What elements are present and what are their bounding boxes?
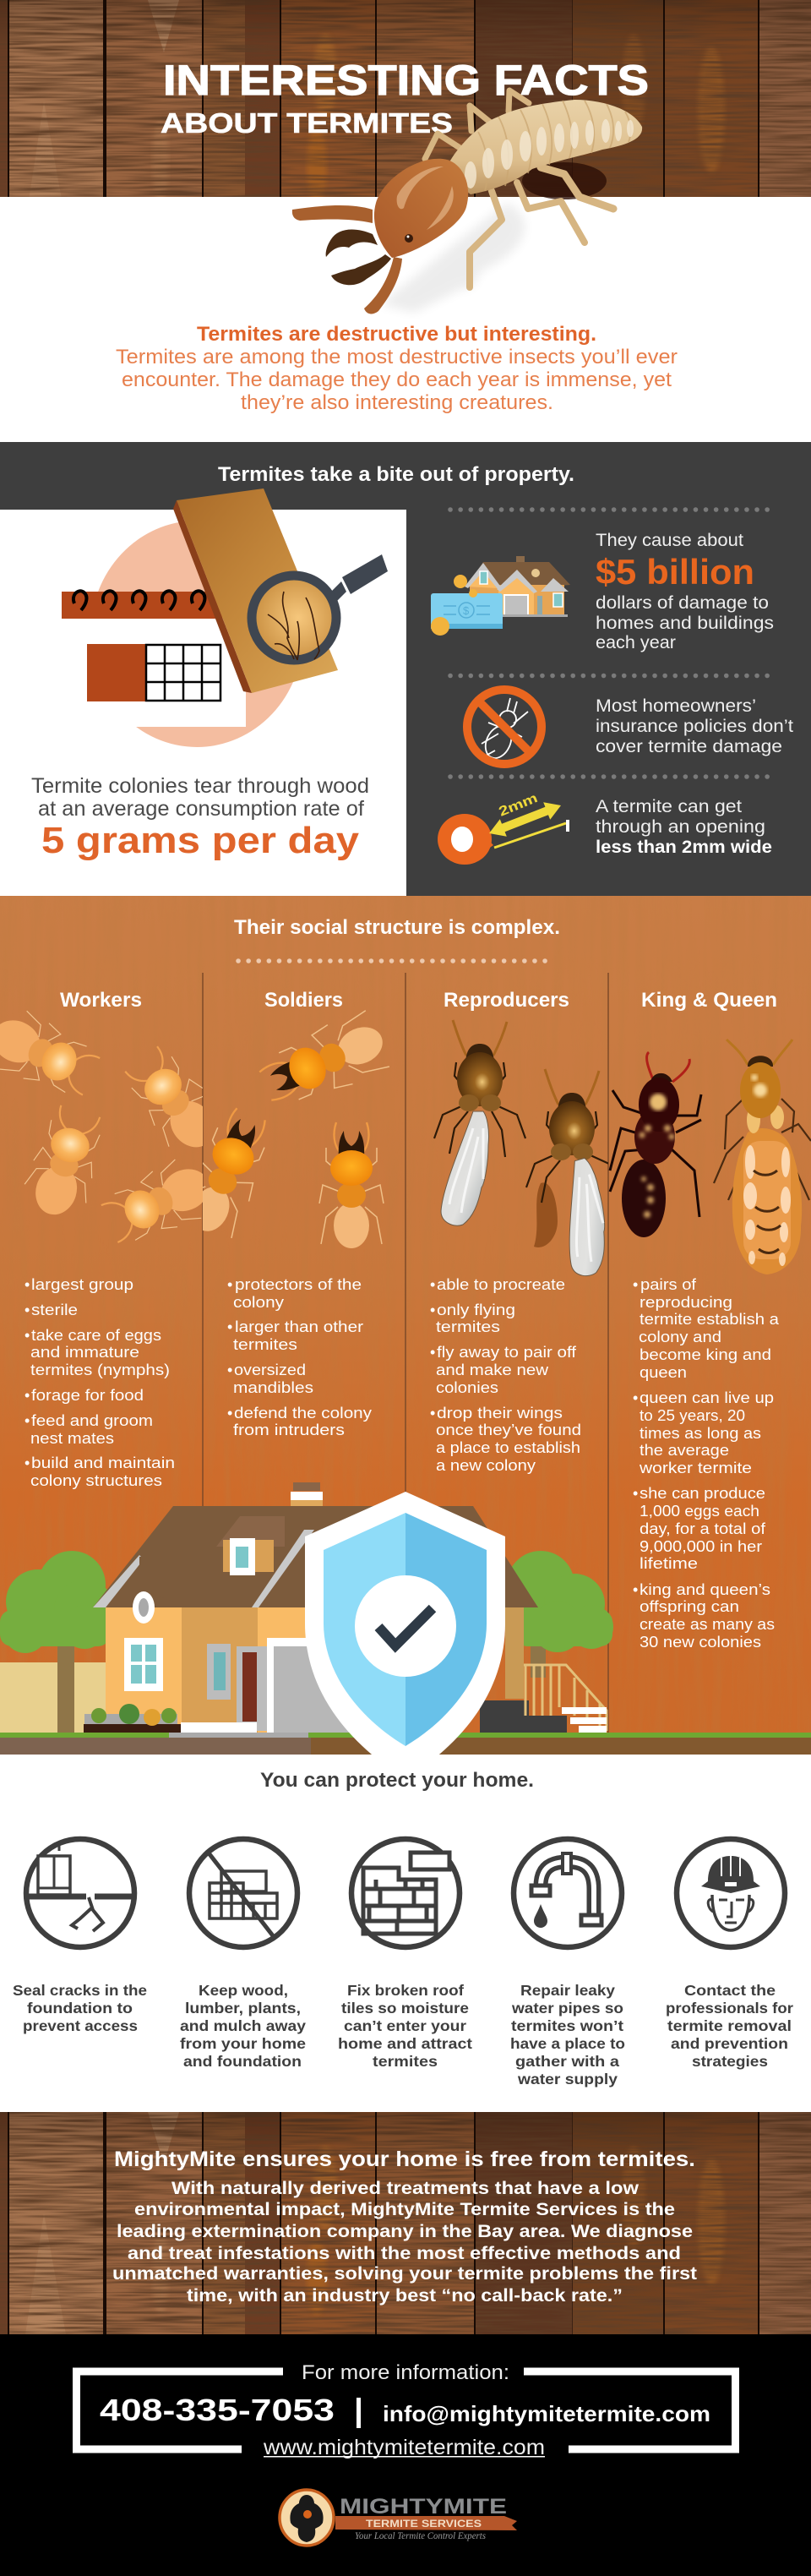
text block: intro: Termites are among the most destructive insects you’ll ever [116,346,678,368]
text: seal cracks [13,1982,147,2034]
text block: insurance: Most homeowners’ [596,696,756,716]
text block: consumption rate: 5 grams per day [41,820,360,861]
bullet list: workers: termites (nymphs) [30,1362,170,1378]
text block: intro: they’re also interesting creatures. [241,391,553,414]
bullet list: king and queen: 1,000 eggs each [640,1503,759,1520]
text: repair pipes: water pipes so [511,2000,623,2017]
text: fix roof tiles: termites [373,2053,438,2070]
text: email: info@mightymitetermite.com [383,2401,710,2426]
bullet list: king and queen: • [633,1581,638,1598]
round window [133,1591,155,1624]
text: contact professionals: and prevention [671,2035,788,2052]
logo: MightyMite: TERMITE SERVICES [366,2518,482,2530]
bullet list: king and queen: times as long as [640,1425,761,1442]
bullet list: soldiers [227,1276,372,1438]
bullet list: reproducers: a place to establish [436,1439,580,1456]
panel: white wood consumption card [0,510,406,896]
chimney [291,1482,323,1506]
queen [714,1040,811,1274]
bullet list: king and queen: create as many as [640,1616,775,1633]
bullet list: king and queen: • [633,1389,638,1406]
bullet list: king and queen: lifetime [640,1555,698,1572]
bullet list: king and queen: she can produce [640,1485,765,1502]
fence [0,1662,110,1733]
illustration: king and queen termites [610,1040,811,1274]
icon: house and money [431,556,570,636]
icon: no termite sign [467,690,542,764]
panel: property section [0,442,811,896]
bullet list: reproducers: • [430,1344,435,1361]
bullet list: workers: feed and groom [31,1412,153,1429]
heading: property: Termites take a bite out of property. [218,463,574,486]
text: repair pipes: Repair leaky [520,1982,615,1999]
bullet list: king and queen: king and queen’s [640,1581,770,1598]
text: repair pipes: have a place to [510,2035,625,2052]
bullet list: king and queen: the average [640,1442,729,1459]
ground [0,1733,811,1755]
column headings: King & Queen [641,989,777,1012]
text: seal cracks: prevent access [23,2017,138,2034]
illustration: wood, calendar and magnifier [62,488,388,747]
text block: 5 billion: They cause about [596,530,743,550]
side window [207,1644,231,1700]
bullet list: reproducers: colonies [436,1379,498,1396]
column headings [60,989,777,1012]
logo: MightyMite: Your Local Termite Control Experts [355,2530,486,2541]
text: fix roof tiles [338,1982,472,2070]
text: contact professionals [666,1982,793,2070]
text: keep wood: Keep wood, [199,1982,288,1999]
bullet list: workers: • [24,1412,30,1429]
bullet list: soldiers: defend the colony [234,1405,372,1422]
bullet list: soldiers: mandibles [233,1379,313,1396]
text block: 2mm [596,796,772,857]
icon: leaky pipe [514,1839,622,1947]
column headings: Soldiers [264,989,343,1012]
bullet list: soldiers: • [227,1318,232,1335]
text block: intro [116,323,678,414]
text block: 2mm: through an opening [596,816,765,837]
text: website: www.mightymitetermite.com [263,2436,545,2459]
title: INTERESTING FACTS [163,57,649,104]
text: for more information: For more information: [302,2361,509,2384]
bullet list: soldiers: colony [233,1294,284,1311]
text: keep wood: lumber, plants, [185,2000,301,2017]
text: fix roof tiles: tiles so moisture [341,2000,469,2017]
heading: protect: You can protect your home. [260,1769,534,1792]
icon: shield [305,1492,505,1779]
bullet list: king and queen: offspring can [640,1598,739,1615]
bullet list: workers: forage for food [31,1387,144,1404]
text: seal cracks: foundation to [27,2000,133,2017]
icon: no wood stack [189,1839,297,1947]
bullet list: king and queen: queen can live up [640,1389,774,1406]
title [161,57,649,139]
text block: insurance [596,696,793,756]
text block: MightyMite: and treat infestations with the most effective methods and [128,2244,681,2263]
bullet list: soldiers: • [227,1276,232,1293]
bullet list: reproducers: • [430,1405,435,1422]
text block: consumption rate [31,774,369,861]
left tree [0,1551,115,1733]
logo: MightyMite [280,2490,517,2546]
icon: cracked foundation [26,1839,134,1947]
text block: consumption rate: Termite colonies tear through wood [31,774,369,798]
bullet list: king and queen: • [633,1276,638,1293]
bullet list: reproducers: only flying [437,1302,515,1318]
roof [93,1506,538,1607]
bullet list: soldiers: oversized [234,1362,306,1378]
text block: 5 billion: homes and buildings [596,613,774,633]
bullet list: king and queen: colony and [639,1329,721,1345]
bullet list: workers: take care of eggs [31,1327,161,1344]
text: keep wood: from your home [180,2035,306,2052]
bullet list: workers: colony structures [30,1472,162,1489]
right tree [507,1551,613,1678]
illustration: soldier termites [203,1010,389,1248]
front steps [181,1722,257,1733]
bullet list: reproducers: able to procreate [437,1276,565,1293]
text block: insurance: insurance policies don’t [596,716,793,736]
bullet list: workers: and immature [30,1344,139,1361]
bullet list: king and queen: worker termite [639,1460,752,1476]
illustration: reproducer termites [434,1020,621,1280]
text block: consumption rate: at an average consumption rate of [38,797,364,821]
bullet list: workers: • [24,1276,30,1293]
text block: MightyMite: time, with an industry best “no call-back rate.” [187,2286,623,2306]
house walls [106,1597,308,1733]
bullet list: reproducers: termites [436,1318,500,1335]
icon: house and money: $ [463,604,470,617]
icon: roof tiles [351,1839,460,1947]
bullet list: workers: • [24,1302,30,1318]
bullet list: reproducers: once they’ve found [436,1422,581,1438]
text: contact professionals: termite removal [667,2017,792,2034]
bullet list: soldiers: from intruders [233,1422,345,1438]
text: contact professionals: professionals for [666,2000,793,2017]
text block: MightyMite: With naturally derived treatments that have a low [171,2179,640,2198]
bullet list: king and queen: reproducing [640,1294,732,1311]
bullet list: workers: sterile [31,1302,78,1318]
text block: insurance: cover termite damage [596,736,782,756]
stairs [524,1665,607,1733]
bullet list: king and queen: queen [640,1364,687,1381]
bullet list: reproducers: a new colony [436,1457,536,1474]
illustration: worker termites [0,1011,203,1243]
garden [84,1704,181,1733]
text: repair pipes: water supply [517,2071,618,2088]
bullet list: workers: • [24,1327,30,1344]
text block: intro: encounter. The damage they do each year is immense, yet [122,368,672,391]
text: contact professionals: strategies [692,2053,768,2070]
column headings: Reproducers [444,989,569,1012]
bullet list: workers: nest mates [30,1430,114,1447]
text: repair pipes: gather with a [515,2053,619,2070]
text: keep wood: and mulch away [180,2017,306,2034]
panel: black contact footer [0,2334,811,2576]
text block: intro: Termites are destructive but interesting. [197,323,596,346]
text: keep wood: and foundation [183,2053,302,2070]
window [124,1638,163,1691]
text: seal cracks: Seal cracks in the [13,1982,147,1999]
contact frame [76,2371,735,2449]
text block: 5 billion: $5 billion [596,552,754,592]
air conditioner [480,1700,529,1733]
dormer [216,1516,285,1575]
bullet list: soldiers: termites [233,1336,297,1353]
bullet list: workers: largest group [31,1276,133,1293]
bullet list: reproducers: fly away to pair off [437,1344,577,1361]
text: phone number: 408-335-7053 [100,2393,335,2427]
column headings: Workers [60,989,142,1012]
text: repair pipes: termites won’t [511,2017,623,2034]
bullet list: workers: • [24,1454,30,1471]
bullet list: king and queen: pairs of [640,1276,697,1293]
bullet list: king and queen: termite establish a [640,1311,780,1328]
text: keep wood [180,1982,306,2070]
logo: MightyMite: MIGHTYMITE [340,2495,507,2519]
bullet list: reproducers: drop their wings [437,1405,563,1422]
door [237,1646,267,1731]
panel: wood header [0,0,811,197]
bullet list: workers: • [24,1387,30,1404]
text block: 5 billion: dollars of damage to [596,592,769,613]
text: fix roof tiles: Fix broken roof [347,1982,464,1999]
bullet list: workers [24,1276,175,1489]
icon: tape measure [438,791,568,865]
text block: MightyMite: unmatched warranties, solving your termite problems the first [112,2264,697,2284]
bullet list: king and queen: day, for a total of [640,1520,766,1537]
garage [267,1638,350,1733]
text block: 5 billion: each year [596,632,676,652]
title: ABOUT TERMITES [161,107,453,139]
text block: MightyMite: environmental impact, MightyMite Termite Services is the [134,2200,675,2219]
panel: wood footer [0,2112,811,2334]
bullet list: reproducers: • [430,1276,435,1293]
illustration: house with trees [0,1482,613,1733]
illustration: large termite [292,90,642,314]
bullet list: reproducers: and make new [436,1362,549,1378]
text block: MightyMite [112,2148,697,2306]
bullet list: king and queen: 9,000,000 in her [640,1538,762,1555]
panel: social structure wood background [0,896,811,1755]
text: repair pipes [510,1982,625,2088]
bullet list: soldiers: larger than other [235,1318,363,1335]
heading: social structure: Their social structure is complex. [234,916,560,939]
king [610,1052,701,1237]
bullet list: king and queen: 30 new colonies [640,1634,761,1651]
text block: 5 billion [596,530,774,652]
bullet list: king and queen: become king and [640,1346,771,1363]
icon: professional with hard hat [677,1839,785,1947]
bullet list: reproducers [430,1276,581,1474]
bullet list: king and queen: to 25 years, 20 [640,1407,745,1424]
text: fix roof tiles: home and attract [338,2035,472,2052]
bullet list: soldiers: • [227,1362,232,1378]
bullet list: soldiers: • [227,1405,232,1422]
text block: 2mm: A termite can get [596,796,742,816]
bullet list: soldiers: protectors of the [235,1276,362,1293]
icon: tape measure: 2mm [497,791,540,820]
text block: MightyMite: MightyMite ensures your home is free from termites. [114,2148,695,2171]
text block: 2mm: less than 2mm wide [596,837,772,857]
text block: MightyMite: leading extermination company in the Bay area. We diagnose [117,2222,693,2241]
text: fix roof tiles: can’t enter your [344,2017,466,2034]
text: contact professionals: Contact the [684,1982,776,1999]
bullet list: workers: build and maintain [31,1454,175,1471]
bullet list: king and queen: • [633,1485,638,1502]
bullet list: king and queen [633,1276,780,1651]
bullet list: reproducers: • [430,1302,435,1318]
